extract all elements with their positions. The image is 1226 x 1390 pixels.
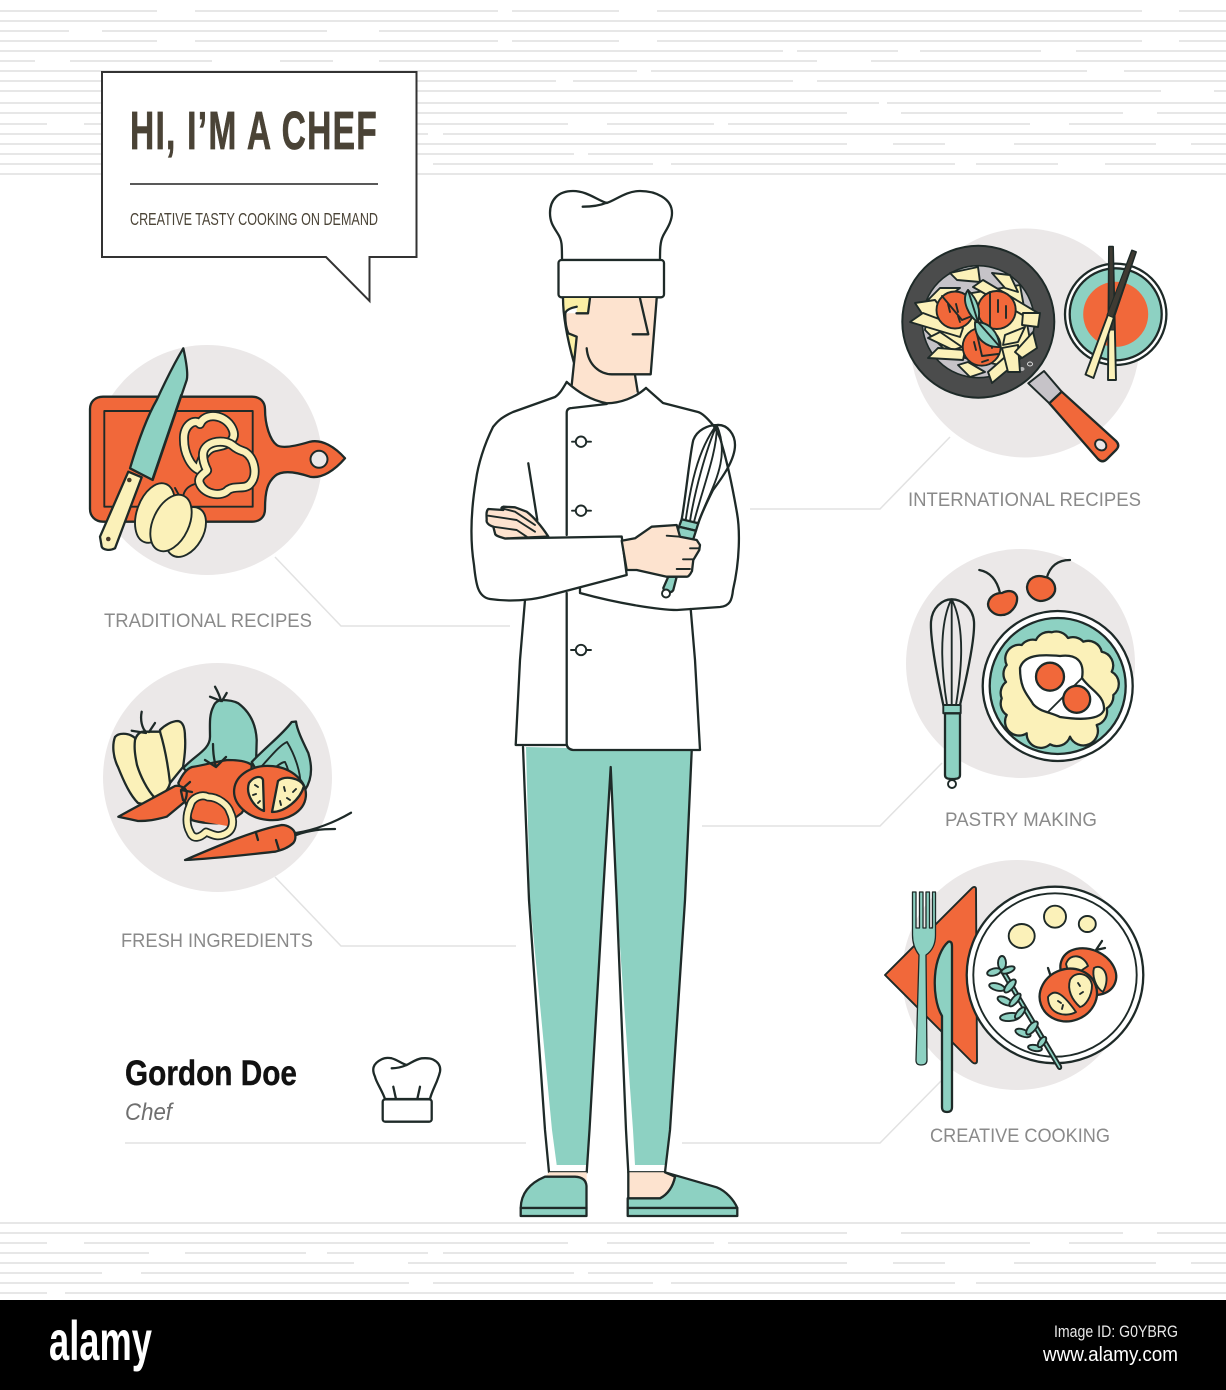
icon: pepper <box>127 478 214 564</box>
icon: tomatoes <box>936 291 1016 366</box>
icon: pepper rings <box>184 416 255 494</box>
label: pastry making: PASTRY MAKING <box>945 810 1097 831</box>
head <box>563 298 657 403</box>
icon: knife <box>100 348 187 550</box>
hat <box>550 191 672 297</box>
panel: creative cooking <box>885 860 1143 1147</box>
pants <box>523 747 692 1172</box>
watermark bar <box>0 1300 1226 1390</box>
subtitle: CREATIVE TASTY COOKING ON DEMAND <box>130 209 378 229</box>
role: Chef <box>125 1099 174 1126</box>
right hand <box>622 525 700 577</box>
icon: pan handle <box>1028 371 1118 461</box>
speech bubble with title <box>102 72 416 301</box>
icon: tomato half <box>231 762 309 824</box>
icon: tomato slices <box>1032 940 1124 1029</box>
name block <box>125 1054 440 1126</box>
icon: dinner plate <box>967 887 1143 1063</box>
chef figure <box>472 191 739 1216</box>
icon: pepper ring <box>187 795 233 837</box>
icon: sauce bowl <box>1065 264 1166 365</box>
title: HI, I’M A CHEF <box>130 101 378 161</box>
icon: gourd <box>183 687 257 775</box>
icon: herb sprig <box>986 956 1061 1069</box>
watermark logo: alamy <box>49 1309 152 1372</box>
label: fresh ingredients: FRESH INGREDIENTS <box>121 931 313 952</box>
right shoe <box>628 1172 737 1216</box>
image id: Image ID: G0YBRG <box>1054 1322 1178 1341</box>
icon: cherries <box>979 560 1070 615</box>
left shoe <box>521 1172 587 1216</box>
icon: chopsticks <box>1086 247 1136 380</box>
icon: whisk <box>931 599 974 788</box>
icon: pasta <box>910 267 1040 383</box>
icon: fork <box>912 892 936 1065</box>
left hand <box>487 507 548 538</box>
label: traditional recipes: TRADITIONAL RECIPES <box>104 611 312 632</box>
label: international recipes: INTERNATIONAL RECIPES <box>908 490 1141 511</box>
name: Gordon Doe <box>125 1054 297 1093</box>
panel: international recipes <box>902 228 1166 511</box>
label: creative cooking: CREATIVE COOKING <box>930 1126 1110 1147</box>
panel: pastry making <box>906 549 1135 831</box>
icon: napkin <box>885 887 977 1063</box>
icon: carrot <box>118 782 192 821</box>
icon: carrot <box>185 813 351 860</box>
icon: basil leaves <box>965 290 1000 347</box>
icon: plate with eggs <box>983 611 1133 761</box>
icon: pan <box>902 246 1054 398</box>
icon: tomato <box>178 744 252 823</box>
whisk <box>662 425 735 598</box>
jacket <box>472 382 739 750</box>
icon: pepper <box>113 712 185 804</box>
panel: fresh ingredients <box>103 663 351 952</box>
site url: www.alamy.com <box>1042 1344 1178 1366</box>
jacket buttons <box>571 436 591 655</box>
icon: cutting board <box>90 397 345 522</box>
icon: chef hat <box>373 1058 440 1122</box>
panel: traditional recipes <box>90 345 345 632</box>
icon: onion <box>252 722 311 790</box>
icon: knife <box>935 942 952 1112</box>
